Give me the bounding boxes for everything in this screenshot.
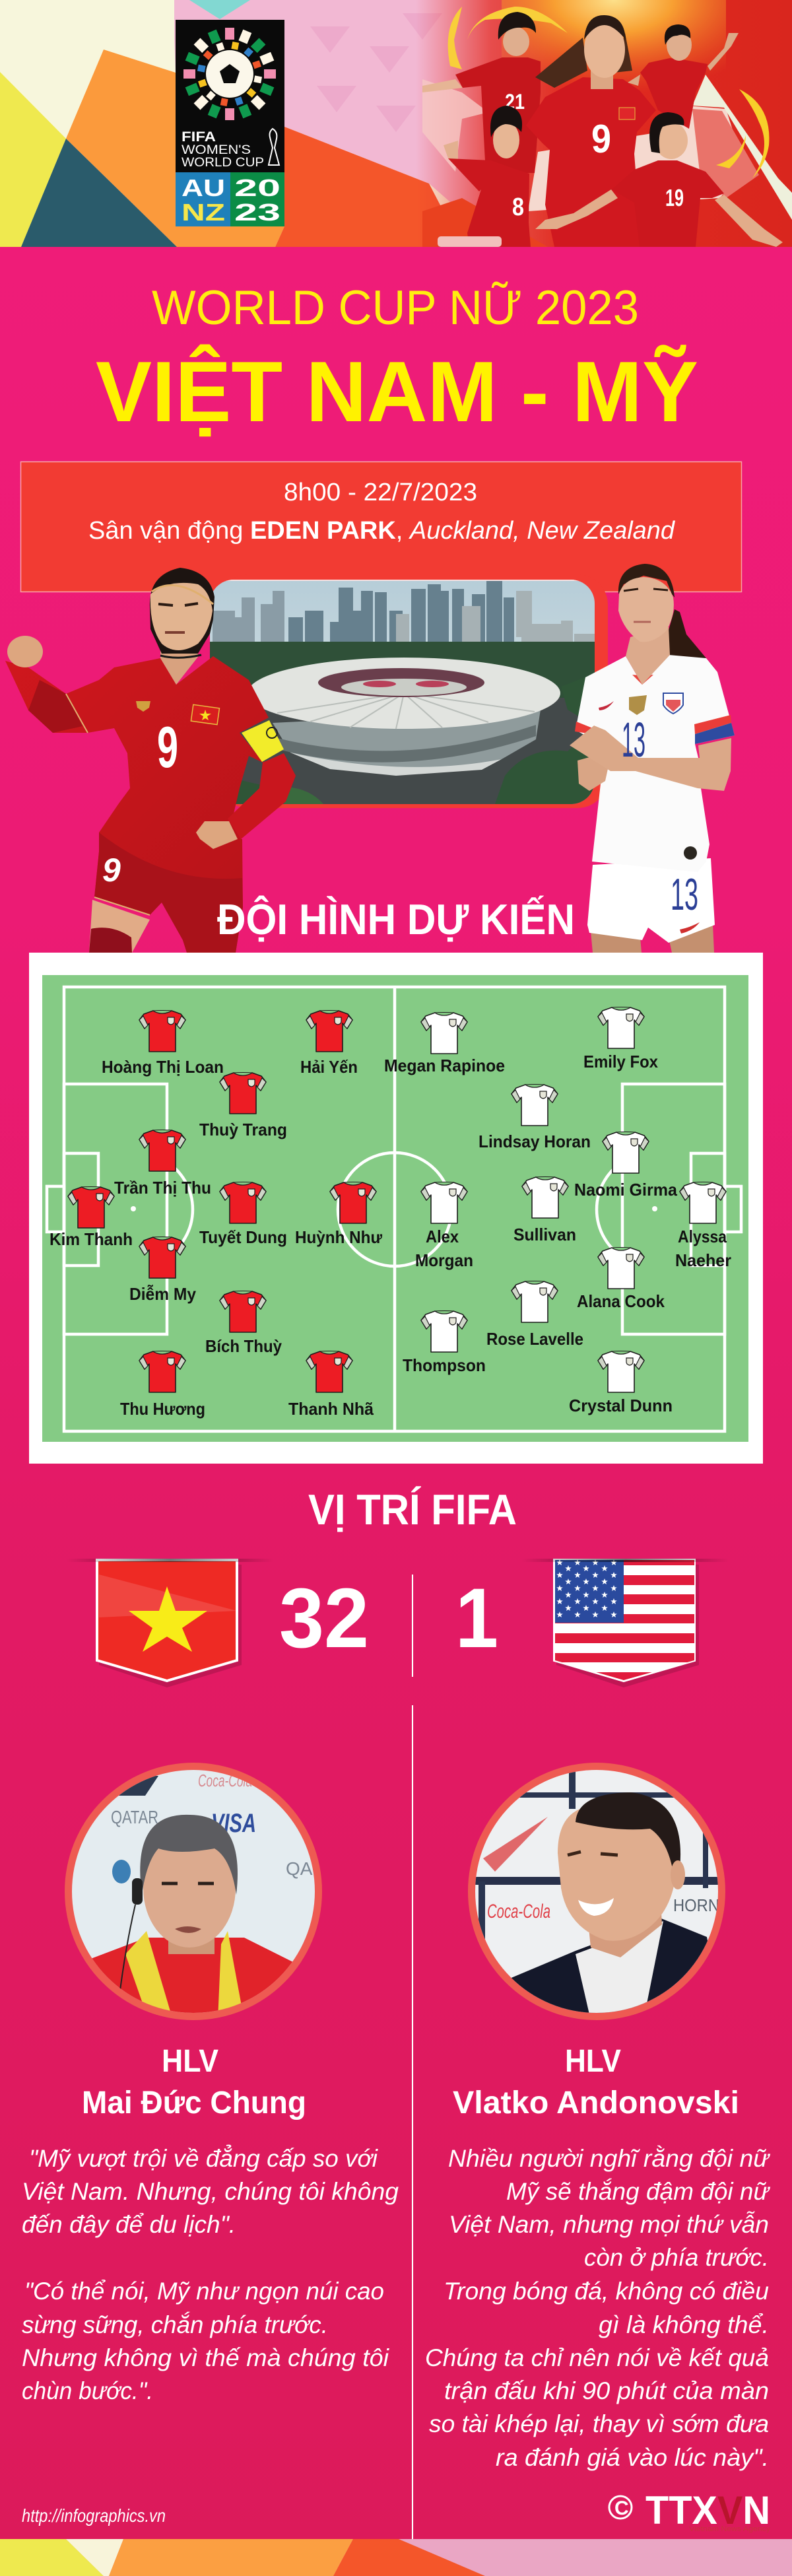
- shorts: [587, 858, 715, 943]
- icon: FIFA Women's World Cup logo: 23: [234, 199, 280, 226]
- player: Kim Thanh: [50, 1187, 133, 1249]
- text block: Mai Đức Chung quote: "Mỹ vượt trội về đẳng cấp so với: [29, 2144, 379, 2172]
- photo: coach Mai Đức Chung: QA: [286, 1858, 313, 1879]
- player 8: [444, 106, 531, 247]
- photo: stadium: [210, 574, 608, 810]
- photo: coach Vlatko Andonovski: [468, 1763, 739, 2020]
- icon: FIFA Women's World Cup logo: FIFA: [182, 129, 216, 145]
- player 19: [535, 112, 783, 247]
- heading: coach Mai Đức Chung: Mai Đức Chung: [82, 2085, 306, 2120]
- text block: Mai Đức Chung quote: sừng sững, chắn phía trước.: [22, 2311, 328, 2338]
- text block: Vlatko Andonovski quote: gì là không thể.: [599, 2311, 769, 2338]
- jersey and shorts: [5, 656, 296, 953]
- icon: Vietnam flag pennant: [66, 1559, 274, 1687]
- player photo: USA number 13: 13: [622, 712, 645, 767]
- text: USA rank: 1: [455, 1571, 498, 1666]
- divider between coaches: [412, 1705, 413, 2539]
- icon: USA flag pennant: [521, 1559, 729, 1687]
- heading: Việt Nam - Mỹ: VIỆT NAM - MỸ: [96, 343, 698, 440]
- player: Alyssa Naeher: [675, 1182, 731, 1270]
- player 21: [422, 12, 541, 173]
- player 21: 21: [505, 90, 525, 114]
- heading: expected lineup: ĐỘI HÌNH DỰ KIẾN: [217, 895, 575, 943]
- text block: Vlatko Andonovski quote: ra đánh giá vào lúc này".: [496, 2444, 769, 2471]
- jersey: [576, 655, 735, 872]
- player: Trần Thị Thu: Trần Thị Thu: [114, 1178, 211, 1198]
- player photo: USA number 13: 13: [671, 869, 698, 920]
- text block: Vlatko Andonovski quote: Việt Nam, nhưng mọi thứ vẫn: [449, 2211, 769, 2238]
- divider: [412, 1575, 413, 1677]
- heading: FIFA ranking: VỊ TRÍ FIFA: [308, 1485, 517, 1534]
- arms and hands: [578, 756, 609, 791]
- panel: match time and venue: [21, 462, 742, 592]
- player: Trần Thị Thu: [114, 1130, 211, 1198]
- text block: Mai Đức Chung quote: Việt Nam. Nhưng, chúng tôi không: [22, 2178, 399, 2205]
- heading: World Cup nữ 2023: WORLD CUP NỮ 2023: [152, 281, 639, 335]
- icon: FIFA Women's World Cup logo: [176, 20, 284, 226]
- icon: FIFA Women's World Cup logo: NZ: [182, 199, 225, 226]
- player: Thompson: Thompson: [403, 1355, 486, 1375]
- player: Bích Thuỳ: Bích Thuỳ: [205, 1336, 282, 1356]
- player 9, flowing hair: 9: [591, 117, 611, 161]
- player 8: 8: [512, 193, 524, 221]
- fist and hand: [7, 636, 43, 667]
- logo: TTXVN copyright: Vietnam News Agency: [689, 2525, 771, 2533]
- player photo: USA number 13: [570, 564, 735, 953]
- photo: coach Mai Đức Chung: [65, 1763, 323, 2020]
- player: Naomi Girma: Naomi Girma: [574, 1180, 678, 1200]
- player 19: 19: [665, 184, 684, 211]
- text block: Vlatko Andonovski quote: [425, 2145, 771, 2471]
- text block: Mai Đức Chung quote: chùn bước.".: [22, 2377, 153, 2404]
- player: Thuỳ Trang: Thuỳ Trang: [199, 1120, 287, 1139]
- legs: [591, 924, 714, 953]
- text: stadium: Sân vận động EDEN PARK, Auckland, New Zealand: [88, 517, 676, 545]
- player: Alyssa Naeher: Naeher: [675, 1250, 731, 1270]
- player: Megan Rapinoe: Megan Rapinoe: [384, 1056, 505, 1075]
- player: Alex Morgan: Alex: [426, 1227, 459, 1246]
- player: Crystal Dunn: [569, 1351, 673, 1415]
- text: kick-off time: 8h00 - 22/7/2023: [284, 479, 477, 506]
- neck and face: [626, 627, 670, 685]
- player: Hoàng Thị Loan: [102, 1010, 224, 1077]
- icon: FIFA Women's World Cup logo: WORLD CUP: [182, 156, 264, 170]
- player: Rose Lavelle: [486, 1281, 583, 1349]
- player: Sullivan: Sullivan: [513, 1225, 576, 1244]
- title: [96, 281, 698, 440]
- player: Megan Rapinoe: [384, 1013, 505, 1075]
- text block: Vlatko Andonovski quote: Nhiều người nghĩ rằng đội nữ: [448, 2145, 771, 2172]
- leg and sock: [89, 900, 150, 953]
- photo: coach Mai Đức Chung: Coca-Cola: [198, 1771, 252, 1790]
- photo: coach Vlatko Andonovski: Coca-Cola: [487, 1901, 550, 1922]
- player: Thu Hương: Thu Hương: [120, 1399, 205, 1419]
- player: Diễm My: [129, 1237, 197, 1304]
- logo: TTXVN copyright: TTXVN: [645, 2488, 770, 2532]
- text: Vietnam rank: 32: [279, 1571, 369, 1666]
- header banner: [0, 0, 792, 247]
- player: Thuỳ Trang: [199, 1072, 287, 1139]
- heading: coach Vlatko Andonovski: [453, 2044, 739, 2120]
- player: Emily Fox: Emily Fox: [583, 1052, 658, 1071]
- player: Kim Thanh: Kim Thanh: [50, 1229, 133, 1249]
- player: Diễm My: Diễm My: [129, 1284, 197, 1304]
- text block: Vlatko Andonovski quote: Chúng ta chỉ nên nói về kết quả: [425, 2344, 769, 2371]
- text block: Vlatko Andonovski quote: so tài khép lại, thay vì sớm đưa: [429, 2410, 769, 2437]
- player photo: Vietnam captain number 9: [5, 568, 296, 953]
- player: Thompson: [403, 1311, 486, 1375]
- player 9, flowing hair: [526, 15, 656, 247]
- player: Tuyết Dung: [199, 1182, 287, 1247]
- photo: coach Vlatko Andonovski: HORN: [673, 1895, 719, 1915]
- player: Crystal Dunn: Crystal Dunn: [569, 1396, 673, 1415]
- text block: Mai Đức Chung quote: Nhưng không vì thế mà chúng tôi: [22, 2344, 390, 2371]
- ponytail: [667, 609, 706, 667]
- icon: FIFA Women's World Cup logo: AU: [182, 174, 225, 201]
- heading: coach Mai Đức Chung: [82, 2044, 306, 2120]
- armband: [242, 720, 284, 762]
- player: Lindsay Horan: Lindsay Horan: [478, 1132, 591, 1151]
- photo: Vietnam team players: [422, 12, 783, 247]
- text block: Mai Đức Chung quote: "Có thể nói, Mỹ như ngọn núi cao: [24, 2278, 384, 2305]
- jersey details: 9: [157, 714, 178, 780]
- player: Sullivan: [513, 1176, 576, 1244]
- text block: Mai Đức Chung quote: đến đây để du lịch".: [22, 2211, 236, 2238]
- player: Alana Cook: Alana Cook: [577, 1291, 665, 1311]
- footer band: [0, 2539, 792, 2576]
- player: Naomi Girma: [574, 1132, 678, 1200]
- player: Lindsay Horan: [478, 1084, 591, 1151]
- neck and face: [160, 647, 198, 685]
- player: Rose Lavelle: Rose Lavelle: [486, 1329, 583, 1349]
- heading: coach Vlatko Andonovski: Vlatko Andonovski: [453, 2085, 739, 2120]
- player: Hoàng Thị Loan: Hoàng Thị Loan: [102, 1057, 224, 1077]
- player 7, jumping: [628, 24, 739, 129]
- player: Alana Cook: [577, 1248, 665, 1311]
- player: Bích Thuỳ: [205, 1291, 282, 1356]
- text block: Mai Đức Chung quote: [22, 2144, 399, 2404]
- panel: football pitch lineup: [29, 953, 763, 1464]
- player: Thu Hương: [120, 1351, 205, 1419]
- text block: Vlatko Andonovski quote: còn ở phía trước.: [584, 2244, 769, 2271]
- player photo: Vietnam captain number 9: 9: [102, 852, 121, 889]
- text block: Vlatko Andonovski quote: Trong bóng đá, không có điều: [444, 2278, 769, 2305]
- player: Emily Fox: [583, 1007, 658, 1071]
- player: Thanh Nhã: Thanh Nhã: [288, 1399, 374, 1419]
- logo: TTXVN copyright: C: [614, 2497, 629, 2519]
- text block: Vlatko Andonovski quote: Mỹ sẽ thắng đậm đội nữ: [506, 2178, 771, 2205]
- text: source url: http://infographics.vn: [22, 2505, 166, 2526]
- player: Huỳnh Như: Huỳnh Như: [295, 1227, 382, 1247]
- text block: Vlatko Andonovski quote: trận đấu khi 90 phút của màn: [444, 2377, 769, 2404]
- photo: coach Mai Đức Chung: QATAR: [111, 1807, 158, 1827]
- player: Hải Yến: Hải Yến: [300, 1057, 358, 1077]
- player: Alex Morgan: [415, 1182, 473, 1270]
- player: Huỳnh Như: [295, 1182, 382, 1247]
- player: Thanh Nhã: [288, 1351, 374, 1419]
- heading: coach Vlatko Andonovski: HLV: [565, 2044, 621, 2079]
- heading: coach Mai Đức Chung: HLV: [162, 2044, 218, 2079]
- icon: FIFA Women's World Cup logo: WOMEN'S: [182, 143, 251, 157]
- player: Hải Yến: [300, 1010, 358, 1077]
- icon: FIFA Women's World Cup logo: 20: [234, 174, 280, 201]
- photo: coach Mai Đức Chung: VISA: [211, 1809, 256, 1838]
- player: Tuyết Dung: Tuyết Dung: [199, 1227, 287, 1247]
- player: Alyssa Naeher: Alyssa: [678, 1227, 727, 1246]
- player: Alex Morgan: Morgan: [415, 1250, 473, 1270]
